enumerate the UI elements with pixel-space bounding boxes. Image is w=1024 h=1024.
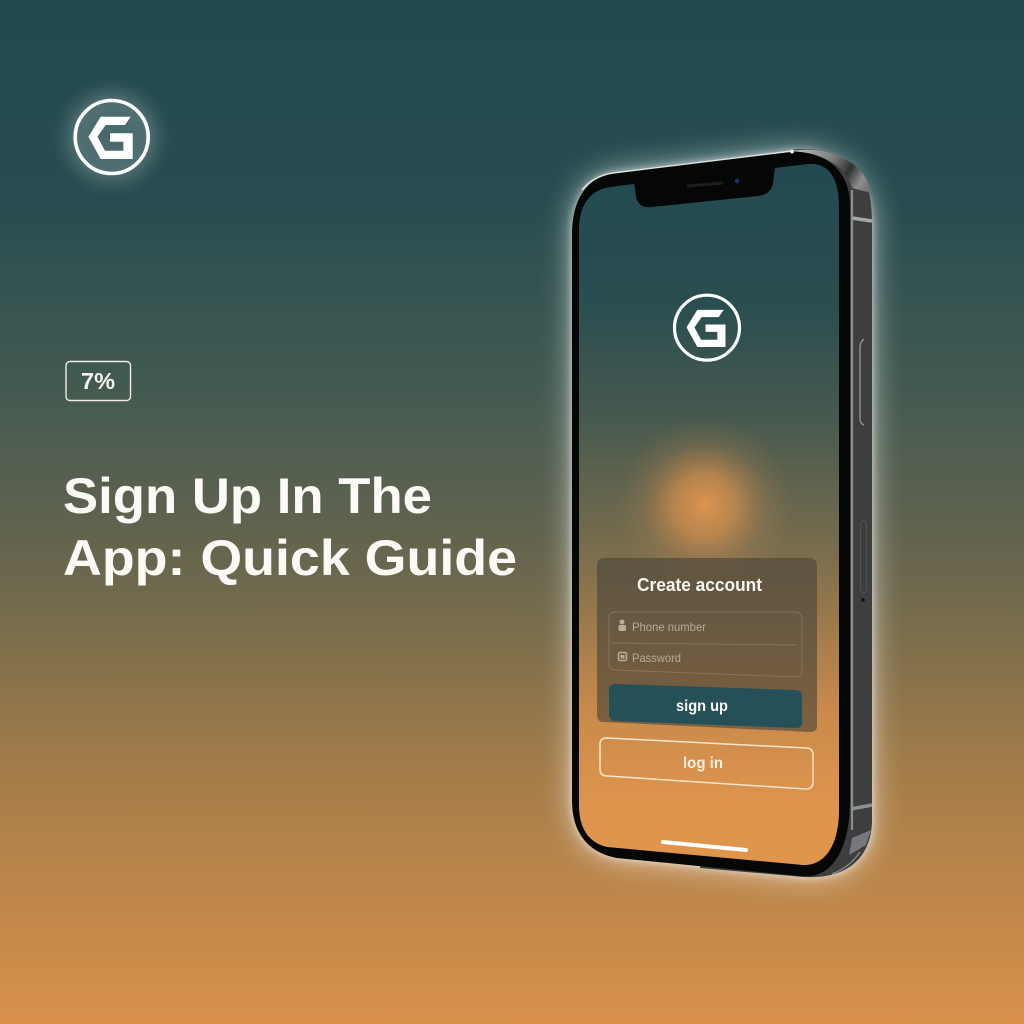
icon: person [618,620,626,631]
create account card [597,558,817,732]
password placeholder: Password [632,651,681,665]
phone screen [579,164,839,865]
phone side frame [700,149,872,877]
title: Sign Up In The [63,468,432,524]
screen logo [674,295,740,360]
log in button [600,738,813,789]
phone number placeholder: Phone number [632,620,706,634]
sign up button: sign up [676,698,728,715]
card heading: Create account [637,575,762,595]
orange glow [617,417,793,593]
top edge highlight [582,151,792,190]
progress badge: 7% [81,368,115,394]
input fields [609,612,802,677]
title: App: Quick Guide [63,530,517,586]
log in button: log in [683,755,723,772]
phone mockup [572,149,872,877]
home indicator [663,842,746,850]
title [63,468,517,586]
sign up button [609,684,802,728]
brand logo [52,77,172,197]
phone front bezel [572,152,850,876]
progress badge [66,362,130,400]
corner highlight dot [790,150,794,154]
notch speaker and camera [688,178,740,186]
icon: password [618,652,626,660]
